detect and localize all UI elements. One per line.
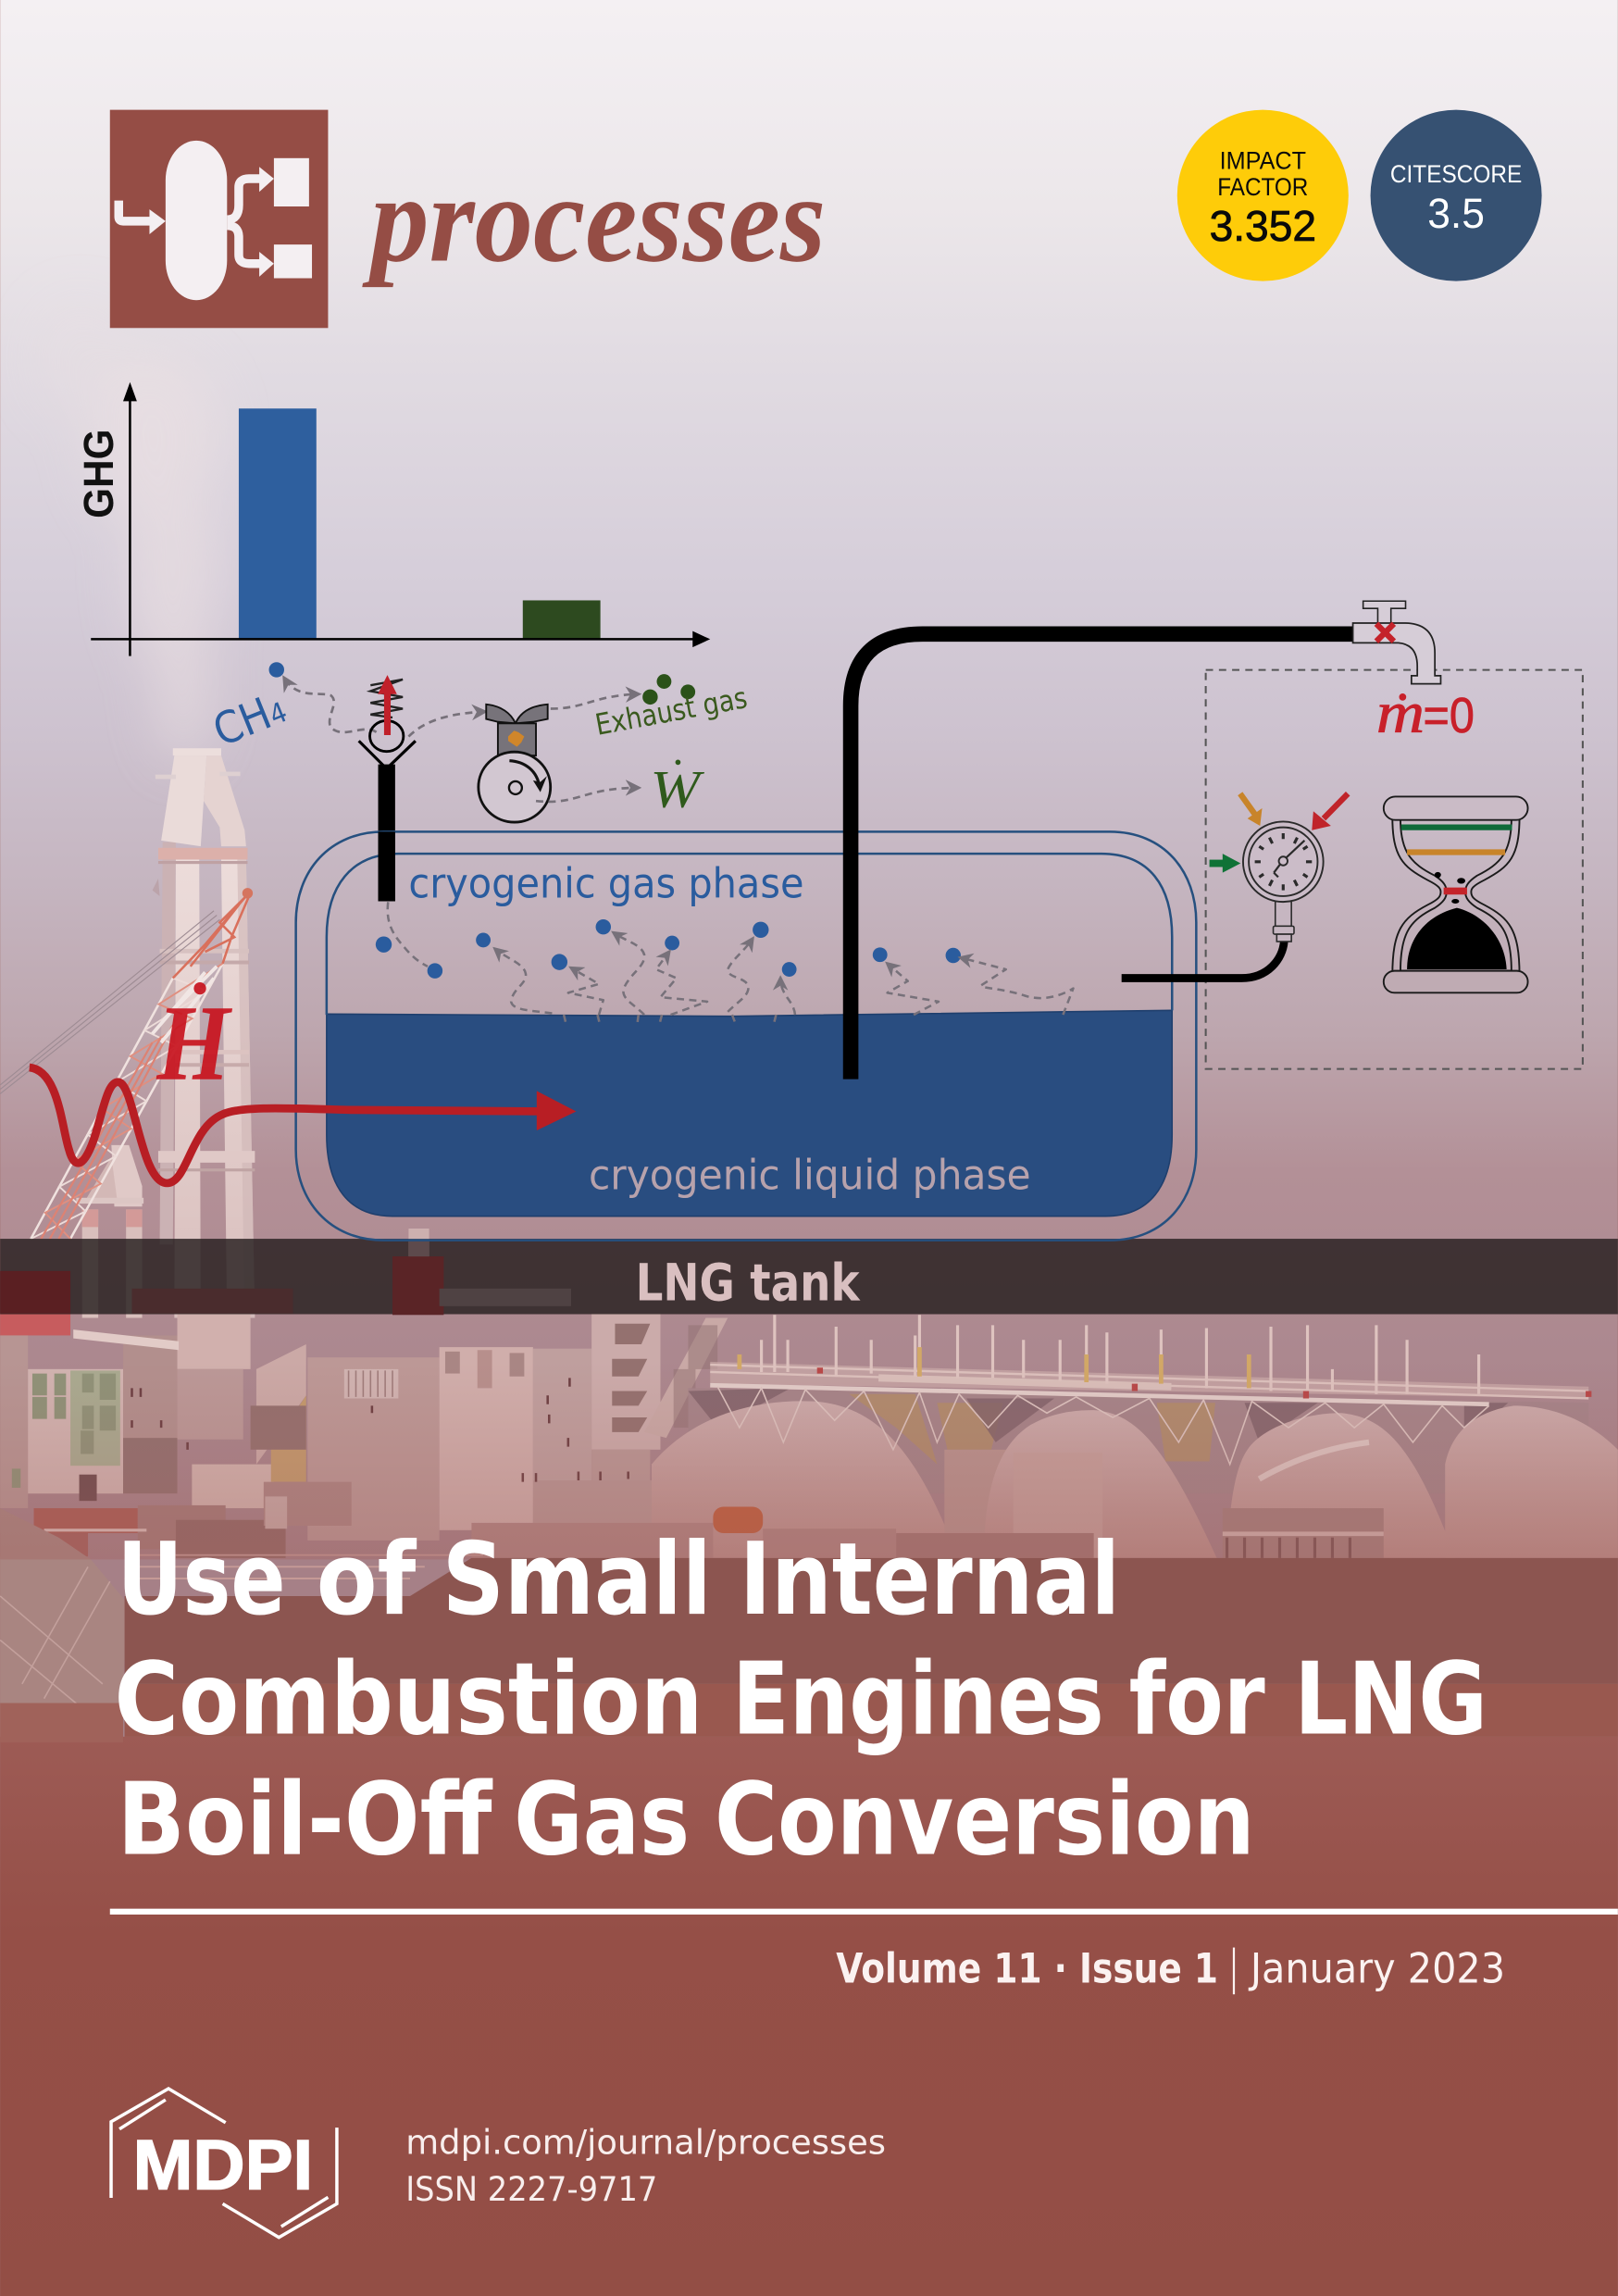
photo: LNG tanks and deck pipe rack bbox=[125, 1315, 1618, 1578]
boil-off molecules and dashed paths bbox=[376, 902, 1073, 1027]
label: mass flow zero: =0 bbox=[1423, 688, 1475, 743]
dashed path: engine to exhaust bbox=[551, 694, 639, 709]
pressure hose bbox=[1122, 942, 1284, 979]
photo: chimney stacks bbox=[76, 748, 255, 1317]
label: work W-dot: W bbox=[650, 760, 704, 818]
vapor stem in tank redrawn bbox=[379, 831, 395, 901]
dashed path: gas to engine bbox=[408, 712, 485, 737]
exhaust gas molecules bbox=[642, 674, 695, 705]
text: LNG tank: LNG tank bbox=[636, 1254, 861, 1313]
title bbox=[115, 1522, 1487, 1878]
photo: bow foot bbox=[0, 1703, 123, 1742]
journal name: processes bbox=[362, 151, 826, 289]
badge: impact factor bbox=[1177, 110, 1349, 281]
badge: impact factor: FACTOR bbox=[1217, 173, 1308, 201]
label: exhaust gas: Exhaust gas bbox=[592, 681, 750, 742]
photo: ship hull bbox=[125, 1558, 1618, 1684]
photo: bow of ship bbox=[0, 1508, 128, 1742]
MDPI logo: MDPI bbox=[133, 2127, 313, 2205]
faucet closed bbox=[1353, 601, 1440, 684]
dashed control box bbox=[1206, 670, 1583, 1069]
title: LNG bbox=[1294, 1642, 1487, 1758]
title: Combustion bbox=[115, 1642, 703, 1758]
label: mass flow zero bbox=[1376, 680, 1475, 745]
ISSN: ISSN 2227-9717 bbox=[405, 2169, 657, 2209]
title: Internal bbox=[740, 1522, 1120, 1638]
title: Boil-Off bbox=[118, 1762, 493, 1878]
title rule bbox=[110, 1909, 1618, 1915]
bar chart: GHG: GHG bbox=[74, 429, 122, 518]
methane molecule and dashed path bbox=[269, 662, 377, 732]
smoke plume bbox=[34, 300, 219, 761]
badge: impact factor: 3.352 bbox=[1210, 202, 1316, 250]
title: Use bbox=[118, 1522, 286, 1638]
photo: ship parts seen through band bbox=[0, 1229, 571, 1315]
title: for bbox=[1129, 1642, 1265, 1758]
issue info bbox=[836, 1946, 1505, 1994]
MDPI logo bbox=[111, 2089, 337, 2238]
journal URL: mdpi.com/journal/processes bbox=[405, 2123, 886, 2163]
photo: crane boom bbox=[0, 888, 253, 1239]
title: of bbox=[317, 1522, 417, 1638]
gas outlet pipe bbox=[851, 634, 1354, 1079]
badge: citescore bbox=[1371, 110, 1542, 281]
issue info: January 2023 bbox=[1248, 1946, 1505, 1993]
dark band bbox=[0, 1239, 1618, 1315]
hourglass bbox=[1384, 796, 1528, 992]
label: CH4: CH4 bbox=[206, 682, 293, 757]
gauge arrows bbox=[1210, 793, 1348, 873]
photo: ship superstructure bbox=[0, 1314, 728, 1558]
liquid phase bbox=[327, 1010, 1172, 1217]
badge: citescore: 3.5 bbox=[1427, 189, 1485, 237]
photo: fade overlay on ship bbox=[0, 1362, 1618, 1559]
badge: citescore: CITESCORE bbox=[1390, 160, 1522, 188]
title: Small bbox=[442, 1522, 712, 1638]
heat label H-dot: H bbox=[156, 984, 232, 1104]
pressure gauge bbox=[1243, 821, 1324, 942]
engine bbox=[479, 705, 551, 822]
badge: impact factor: IMPACT bbox=[1220, 147, 1306, 175]
heat wave arrow bbox=[30, 1067, 577, 1183]
title: Engines bbox=[732, 1642, 1104, 1758]
label: mass flow zero: m bbox=[1376, 680, 1425, 745]
label: cryogenic liquid phase: cryogenic liquid phase bbox=[589, 1152, 1031, 1199]
issue info: Volume 11 · Issue 1 bbox=[836, 1946, 1218, 1993]
photo: water lower area bbox=[0, 1737, 1618, 2296]
label: cryogenic gas phase: cryogenic gas phase bbox=[408, 861, 803, 908]
LNG tank outer wall bbox=[296, 831, 1196, 1241]
dashed path: engine to work bbox=[536, 788, 639, 802]
logo square bbox=[110, 110, 328, 328]
bar chart: GHG bbox=[74, 382, 710, 656]
title: Conversion bbox=[715, 1762, 1255, 1878]
title: Gas bbox=[514, 1762, 690, 1878]
injector / ignition bbox=[359, 675, 416, 901]
LNG tank inner wall bbox=[327, 854, 1172, 1015]
photo: boot-top and sea bbox=[125, 1684, 1618, 1737]
